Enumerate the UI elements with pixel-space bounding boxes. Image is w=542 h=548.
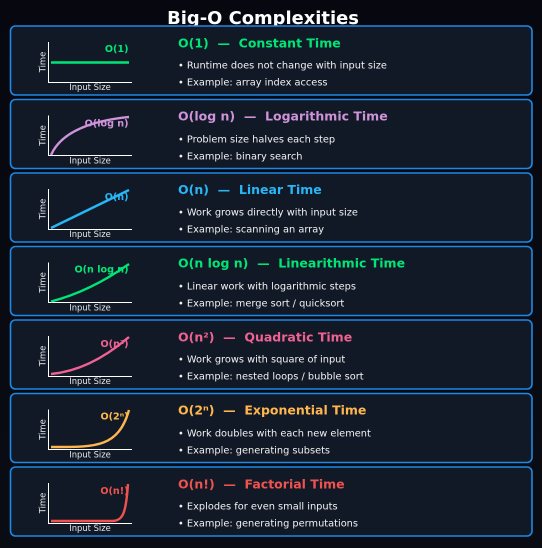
- chart: O(n): O(n): [105, 192, 128, 203]
- chart: O(2ⁿ): [37, 410, 132, 460]
- bullets: • Work doubles with each new element: [178, 428, 371, 440]
- bullets: • Work grows directly with input size: [178, 208, 358, 218]
- chart: O(log n): Input Size: [69, 156, 111, 166]
- bullets: [178, 428, 371, 456]
- chart: O(n²): Time: [37, 346, 47, 367]
- chart: O(n log n): O(n log n): [74, 264, 128, 276]
- chart: O(log n): O(log n): [85, 118, 128, 130]
- chart: O(n log n): Time: [37, 272, 47, 294]
- panel: linear time: [10, 173, 532, 242]
- heading: O(1) — Constant Time: [178, 36, 341, 50]
- chart: O(n²): Input Size: [69, 376, 111, 386]
- heading: O(n²) — Quadratic Time: [178, 330, 352, 344]
- chart: O(2ⁿ): O(2ⁿ): [101, 412, 128, 422]
- chart: O(1): O(1): [105, 44, 128, 55]
- chart: O(n log n): [37, 262, 132, 312]
- chart: O(n): [37, 189, 132, 239]
- chart: O(1): [37, 42, 132, 92]
- chart: O(log n): Time: [37, 125, 47, 147]
- bullets: • Problem size halves each step: [178, 134, 335, 146]
- title: Big-O Complexities: [167, 8, 359, 29]
- panel: quadratic time: [10, 320, 532, 389]
- heading: O(2ⁿ) — Exponential Time: [178, 402, 366, 418]
- chart: O(n): Input Size: [69, 229, 111, 239]
- bullets: • Example: generating subsets: [178, 446, 330, 456]
- bullets: [178, 354, 364, 382]
- bullets: • Linear work with logarithmic steps: [178, 282, 356, 292]
- heading: O(n) — Linear Time: [178, 182, 322, 197]
- chart: O(n²): O(n²): [101, 339, 128, 350]
- chart: O(2ⁿ): Input Size: [69, 450, 111, 460]
- chart: O(1): Input Size: [69, 82, 111, 92]
- chart: O(n²): [37, 336, 132, 386]
- chart: O(log n): [37, 116, 132, 166]
- chart: O(n log n): Input Size: [69, 302, 111, 312]
- bullets: • Explodes for even small inputs: [178, 502, 338, 512]
- chart: O(1): Time: [37, 52, 47, 73]
- bullets: • Example: merge sort / quicksort: [178, 298, 344, 310]
- heading: O(n log n) — Linearithmic Time: [178, 256, 405, 270]
- bullets: [178, 208, 358, 236]
- chart: O(n): Time: [37, 199, 47, 220]
- chart: O(n!): Input Size: [69, 523, 111, 533]
- panel: logarithmic time: [10, 100, 532, 168]
- panel: exponential time: [10, 394, 532, 462]
- bullets: • Work grows with square of input: [178, 354, 345, 366]
- bullets: [178, 282, 356, 310]
- bullets: [178, 60, 387, 88]
- bullets: • Example: generating permutations: [178, 518, 358, 530]
- bullets: • Example: array index access: [178, 78, 328, 88]
- chart: O(n!): [37, 483, 132, 533]
- chart: O(n!): O(n!): [100, 486, 128, 497]
- panel: constant time: [10, 26, 532, 95]
- heading: O(log n) — Logarithmic Time: [178, 108, 388, 124]
- chart: O(n!): Time: [37, 493, 47, 514]
- bullets: [178, 134, 335, 162]
- heading: O(n!) — Factorial Time: [178, 476, 345, 492]
- bullets: • Runtime does not change with input size: [178, 60, 387, 72]
- chart: O(2ⁿ): Time: [37, 419, 47, 441]
- bullets: • Example: nested loops / bubble sort: [178, 372, 364, 382]
- bullets: • Example: binary search: [178, 152, 302, 162]
- panel: linearithmic time: [10, 246, 532, 316]
- panel: factorial time: [10, 467, 532, 536]
- bullets: [178, 502, 358, 530]
- bullets: • Example: scanning an array: [178, 224, 324, 236]
